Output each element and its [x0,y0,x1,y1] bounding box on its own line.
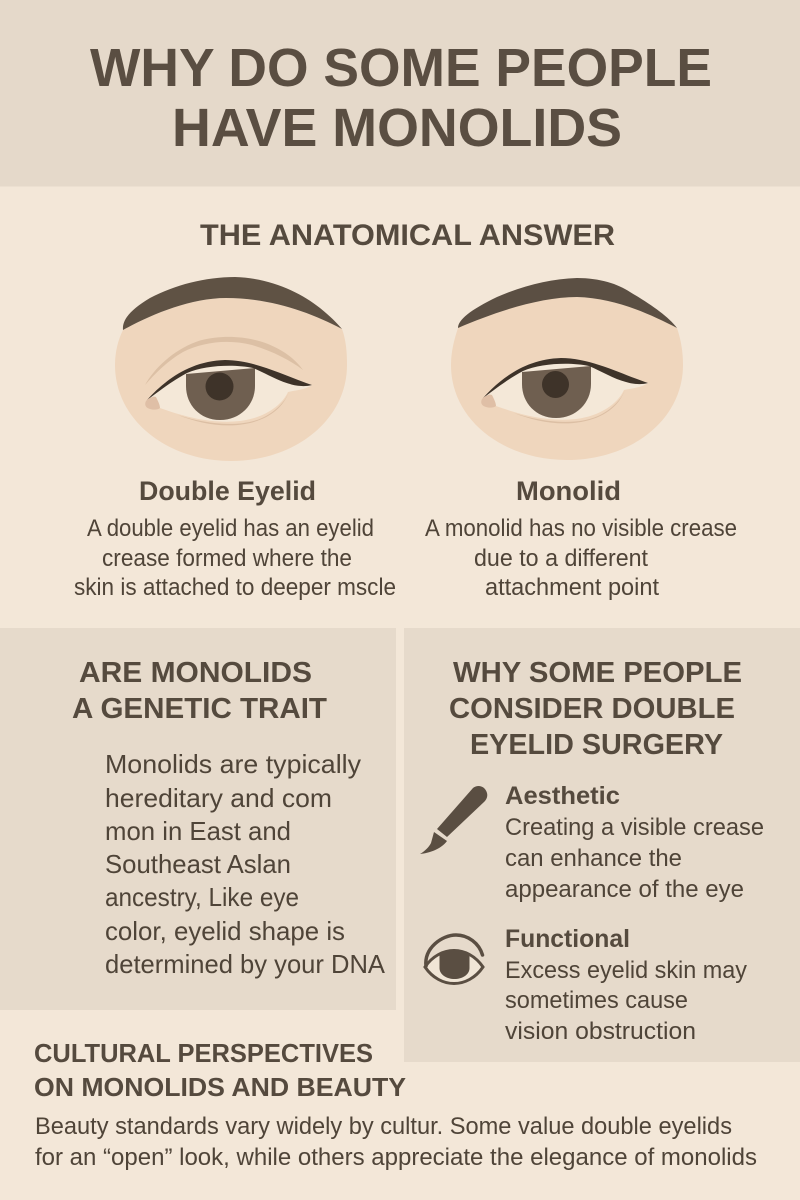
text block: monolid: attachment point [485,574,659,601]
text block: functional: vision obstruction [505,1018,696,1045]
text block: aesthetic [505,782,764,903]
text block: double eyelid: skin is attached to deeper mscle [74,574,396,601]
text block: genetic explanation: mon in East and [105,816,291,846]
text block: double eyelid: Double Eyelid [139,476,316,506]
text block: aesthetic: can enhance the [505,845,682,872]
text block: aesthetic: appearance of the eye [505,876,744,903]
text block: monolid: due to a different [474,545,648,572]
text block: aesthetic: Aesthetic [505,782,620,810]
text block: functional: Excess eyelid skin may [505,957,747,984]
section: cultural perspectives [34,1038,757,1171]
text block: functional: sometimes cause [505,987,688,1014]
heading: surgery: CONSIDER DOUBLE [449,693,735,725]
text block: aesthetic: Creating a visible crease [505,814,764,841]
heading: genetic trait: A GENETIC TRAIT [72,693,327,725]
header band [0,0,800,186]
text block: functional: Functional [505,925,630,953]
heading: genetic trait: ARE MONOLIDS [79,657,312,689]
title [90,38,712,158]
heading: surgery: WHY SOME PEOPLE [453,657,742,689]
title: HAVE MONOLIDS [172,98,622,158]
text block: genetic explanation: Monolids are typically [105,749,361,779]
panel: double eyelid surgery [404,628,800,1062]
heading: cultural perspectives: CULTURAL PERSPECTIVES [34,1038,373,1068]
text block: monolid: Monolid [516,476,621,506]
heading: genetic trait [72,657,327,725]
text block: genetic explanation [105,749,386,979]
text block: monolid: A monolid has no visible crease [425,515,737,542]
icon: eye [425,935,483,984]
text block: genetic explanation: color, eyelid shape is [105,916,345,946]
illustration: double eyelid eye [115,277,347,461]
text block: genetic explanation: Southeast Aslan [105,849,291,879]
text block: double eyelid: crease formed where the [102,545,352,572]
text block: monolid [425,476,737,601]
text block: genetic explanation: ancestry, Like eye [105,882,299,912]
icon: scalpel [420,786,487,854]
heading: surgery [449,657,742,761]
text block: double eyelid: A double eyelid has an eyelid [87,515,374,542]
heading: cultural perspectives: ON MONOLIDS AND BEAUTY [34,1072,406,1102]
text block: cultural explanation: for an “open” look, while others appreciate the elegance of monolids [35,1144,757,1171]
text block: genetic explanation: determined by your DNA [105,949,386,979]
text block: cultural explanation [35,1113,757,1171]
text block: functional [505,925,747,1045]
illustration: monolid eye [451,278,683,460]
heading: surgery: EYELID SURGERY [470,729,723,761]
text block: cultural explanation: Beauty standards vary widely by cultur. Some value double eyelids [35,1113,732,1140]
panel: genetic trait [0,628,396,1010]
title: WHY DO SOME PEOPLE [90,38,712,98]
text block: genetic explanation: hereditary and com [105,783,332,813]
text block: double eyelid [74,476,396,601]
heading: the anatomical answer: THE ANATOMICAL ANSWER [200,219,615,252]
heading: cultural perspectives [34,1038,406,1102]
